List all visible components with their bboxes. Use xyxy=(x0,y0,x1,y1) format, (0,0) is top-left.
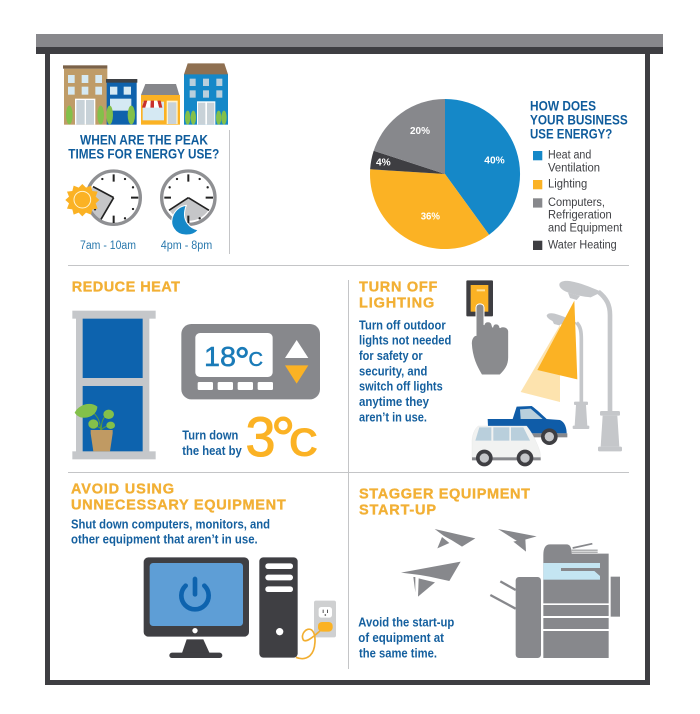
clock labels: 4pm - 8pm xyxy=(161,240,212,252)
text: shut down computers: other equipment that aren’t in use. xyxy=(71,531,258,546)
pie chart: business energy use: 40% xyxy=(484,155,505,166)
icon: white van xyxy=(472,426,541,466)
text: avoid start-up: the same time. xyxy=(359,645,437,660)
text: turn off outdoor lights xyxy=(359,317,451,424)
icon: wall outlet and plug xyxy=(296,601,336,659)
icon: morning clock with sun xyxy=(65,171,140,224)
clock labels: 7am - 10am xyxy=(80,240,136,252)
text: turn off outdoor lights: for safety or xyxy=(359,348,423,363)
pie chart: business energy use: 20% xyxy=(410,126,430,137)
heading: avoid using unnecessary equipment: AVOID USING xyxy=(71,481,174,497)
icon: window with plant xyxy=(72,311,156,459)
heading: peak times: TIMES FOR ENERGY USE? xyxy=(68,146,219,161)
thermostat reading: ° xyxy=(235,339,249,380)
pie legend: Heat and xyxy=(548,150,591,162)
callout: turn down the heat: C xyxy=(289,421,318,465)
callout: turn down the heat: the heat by xyxy=(182,443,242,458)
thermostat reading xyxy=(204,339,263,380)
icon: street lamps with light beams xyxy=(521,281,622,451)
text: turn off outdoor lights: lights not needed xyxy=(359,333,451,348)
pie legend: Refrigeration xyxy=(548,210,612,222)
heading: stagger equipment start-up: STAGGER EQUIPMENT xyxy=(359,486,530,502)
pie chart: business energy use: 4% xyxy=(376,158,391,169)
text: turn off outdoor lights: aren’t in use. xyxy=(359,409,427,424)
pie legend xyxy=(533,150,623,252)
heading: peak times xyxy=(68,132,219,161)
heading: turn off lighting: LIGHTING xyxy=(359,296,434,312)
heading: peak times: WHEN ARE THE PEAK xyxy=(80,132,208,147)
pie legend: Water Heating xyxy=(548,240,617,252)
text: shut down computers xyxy=(71,516,270,546)
clock labels xyxy=(80,240,212,252)
text: turn off outdoor lights: Turn off outdoor xyxy=(359,317,446,332)
callout: turn down the heat: ° xyxy=(272,405,295,470)
icon: blue pickup xyxy=(488,406,567,445)
icon: office copier xyxy=(490,544,620,658)
callout: turn down the heat: Turn down xyxy=(182,427,238,442)
icon: computer tower xyxy=(259,557,298,658)
text: avoid start-up xyxy=(358,615,454,660)
pie legend: Ventilation xyxy=(548,162,600,174)
heading: reduce heat: REDUCE HEAT xyxy=(72,280,180,296)
heading: how does your business use energy xyxy=(530,98,628,142)
text: turn off outdoor lights: anytime they xyxy=(359,394,430,409)
callout: turn down the heat xyxy=(182,405,318,470)
text: avoid start-up: of equipment at xyxy=(358,630,445,645)
text: turn off outdoor lights: security, and xyxy=(359,363,427,378)
icon: thermostat xyxy=(181,324,320,399)
pie legend: Lighting xyxy=(548,179,587,191)
heading: turn off lighting: TURN OFF xyxy=(359,279,437,295)
icon: monitor with power symbol xyxy=(144,557,249,658)
pie chart: business energy use: 36% xyxy=(421,211,440,222)
pie legend: and Equipment xyxy=(548,222,623,234)
heading: avoid using unnecessary equipment xyxy=(71,481,286,514)
heading: how does your business use energy: USE ENERGY? xyxy=(530,126,612,142)
callout: turn down the heat: 3 xyxy=(246,405,276,468)
icon: light switch and hand xyxy=(466,280,509,375)
thermostat reading: C xyxy=(248,349,263,371)
heading: how does your business use energy: HOW DOES xyxy=(530,98,596,114)
text: shut down computers: Shut down computers, monitors, and xyxy=(71,516,270,531)
heading: stagger equipment start-up xyxy=(359,486,530,518)
text: avoid start-up: Avoid the start-up xyxy=(358,615,454,630)
heading: how does your business use energy: YOUR BUSINESS xyxy=(530,112,628,128)
text: turn off outdoor lights: switch off lights xyxy=(359,379,443,394)
thermostat reading: 18 xyxy=(204,341,236,372)
heading: turn off lighting xyxy=(359,279,437,312)
icon: row of buildings xyxy=(63,63,228,125)
heading: stagger equipment start-up: START-UP xyxy=(359,502,436,518)
icon: paper planes xyxy=(401,529,537,597)
pie legend: Computers, xyxy=(548,197,605,209)
pie chart: business energy use xyxy=(370,99,520,249)
icon: evening clock with moon xyxy=(162,171,215,235)
heading: avoid using unnecessary equipment: UNNECESSARY EQUIPMENT xyxy=(71,498,286,514)
